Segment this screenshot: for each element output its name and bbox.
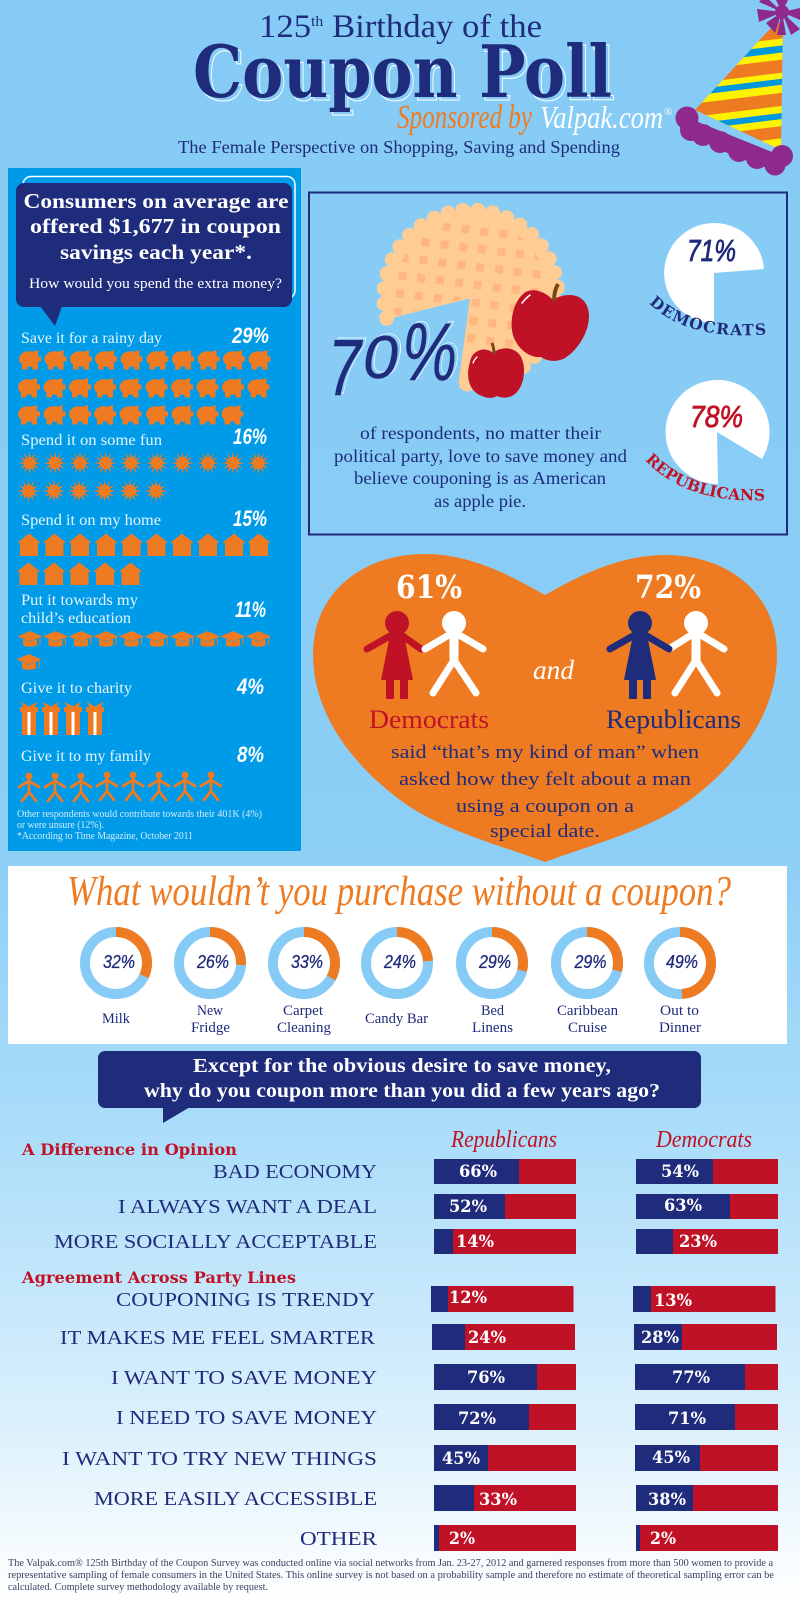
row: bad economy: 54%	[661, 1162, 699, 1181]
row: charity: Give it to charity	[21, 680, 132, 697]
icon: lattice pie with missing slice	[384, 210, 558, 388]
label: Democrats: Democrats	[369, 705, 489, 734]
row: couponing is trendy: COUPONING IS TRENDY	[116, 1289, 375, 1311]
donut: milk: Milk	[102, 1011, 130, 1027]
row: try new things: 45%	[442, 1449, 480, 1468]
row: other: 2%	[449, 1529, 475, 1548]
title: Coupon Poll: Coupon Poll	[196, 32, 615, 117]
stat: 61%: 61%	[396, 568, 462, 606]
title: Coupon Poll: Coupon Poll	[193, 29, 612, 114]
row: couponing is trendy: 12%	[449, 1288, 487, 1307]
text: of respondents	[334, 423, 627, 511]
stat: 70%: 7	[328, 323, 363, 412]
icon: large apple	[512, 284, 589, 361]
row: couponing is trendy	[116, 1286, 776, 1312]
row: more socially acceptable: MORE SOCIALLY ACCEPTABLE	[54, 1231, 377, 1253]
footnote: other respondents	[17, 809, 262, 842]
stat: 70%: 0	[363, 324, 398, 391]
stat: 70%	[328, 305, 460, 412]
icon: blue woman and white man	[610, 611, 724, 699]
column heading: Democrats: Democrats	[655, 1127, 752, 1153]
row: child's education: child’s education	[21, 610, 131, 627]
row: my family: Give it to my family	[21, 748, 151, 765]
row: try new things: I WANT TO TRY NEW THINGS	[62, 1448, 377, 1470]
row: bad economy: BAD ECONOMY	[213, 1161, 377, 1183]
callout: except for the obvious desire: Except for the obvious desire to save money,	[193, 1055, 611, 1077]
pie: democrats 71%: 71%	[687, 233, 736, 268]
subtitle: The Female Perspective on Shopping, Saving and Spending	[178, 137, 620, 157]
donut: caribbean cruise: Cruise	[568, 1020, 607, 1036]
row: couponing is trendy: 13%	[654, 1291, 692, 1310]
donut: new fridge: 26%	[196, 952, 229, 972]
donut: carpet cleaning: Cleaning	[277, 1020, 331, 1036]
donut: bed linens	[461, 932, 523, 1036]
row: more easily accessible: 33%	[479, 1490, 517, 1509]
pie: republicans 78%	[646, 380, 770, 501]
callout: except for the obvious desire	[98, 1051, 701, 1123]
row: more socially acceptable: 23%	[679, 1232, 717, 1251]
panel: how would you spend	[8, 168, 301, 851]
stat: 70%: %	[405, 305, 460, 396]
title: 125th Birthday of the: 125	[259, 9, 308, 45]
panel: heart	[313, 554, 777, 862]
row: always want a deal: 52%	[449, 1197, 487, 1216]
row: always want a deal: 63%	[664, 1196, 702, 1215]
donut: carpet cleaning: Carpet	[283, 1003, 324, 1019]
row: makes me feel smarter: IT MAKES ME FEEL SMARTER	[60, 1327, 376, 1349]
row: more socially acceptable	[54, 1229, 778, 1254]
pie: republicans 78%: 78%	[690, 399, 743, 434]
pie: republicans 78%: REPUBLICANS	[646, 452, 764, 501]
stat: 70%: 7	[331, 321, 366, 410]
row: charity: 4%	[236, 674, 264, 699]
row: want to save money: 76%	[467, 1368, 505, 1387]
row: need to save money: 71%	[668, 1409, 706, 1428]
footnote: survey methodology: representative sampling of female consumers in the United States. This online survey is not based on a probability sample and therefore no estimate of theoretical sampling error can be	[8, 1569, 774, 1581]
callout: consumers on average: savings each year*.	[60, 240, 252, 264]
row: try new things	[62, 1445, 778, 1471]
row: bad economy	[213, 1159, 778, 1184]
row: rainy day	[18, 323, 270, 424]
donut: bed linens: Linens	[472, 1020, 513, 1036]
footnote: other respondents: *According to Time Magazine, October 2011	[17, 831, 193, 842]
row: more socially acceptable: 14%	[456, 1232, 494, 1251]
donut: new fridge: New	[197, 1003, 223, 1019]
text: that's my kind of man: special date.	[490, 821, 600, 842]
text: of respondents: believe couponing is as American	[354, 468, 606, 488]
title: 125th Birthday of the: Birthday of the	[323, 9, 542, 45]
sponsor line	[397, 99, 672, 136]
row: makes me feel smarter: 28%	[641, 1328, 679, 1347]
row: bad economy: 66%	[459, 1162, 497, 1181]
donut: milk	[85, 932, 147, 1027]
row: need to save money: I NEED TO SAVE MONEY	[116, 1407, 377, 1429]
row: need to save money: 72%	[458, 1409, 496, 1428]
row: more easily accessible: 38%	[648, 1490, 686, 1509]
row: my family	[19, 742, 264, 801]
row: always want a deal	[118, 1194, 778, 1219]
callout: except for the obvious desire: why do you coupon more than you did a few years ago?	[144, 1080, 660, 1102]
row: my family: 8%	[237, 742, 264, 767]
row: some fun: 16%	[233, 424, 267, 449]
callout: consumers on average: How would you spend the extra money?	[29, 276, 282, 292]
row: other: OTHER	[300, 1528, 378, 1550]
row: more easily accessible: MORE EASILY ACCESSIBLE	[94, 1488, 377, 1510]
icon: party hat	[675, 0, 800, 176]
row: want to save money	[111, 1364, 778, 1390]
row: more easily accessible	[94, 1485, 778, 1511]
pie: democrats 71%	[649, 223, 766, 336]
row: child's education	[16, 592, 271, 670]
row: other: 2%	[650, 1529, 676, 1548]
callout: consumers on average	[16, 176, 295, 326]
row: charity	[20, 674, 264, 735]
sponsor line: Valpak.com	[540, 99, 663, 135]
donut: carpet cleaning: 33%	[291, 952, 323, 972]
donut: caribbean cruise: 29%	[574, 952, 606, 972]
row: other	[300, 1525, 778, 1551]
icon: small apple	[468, 343, 524, 398]
donut: caribbean cruise	[556, 932, 618, 1036]
footnote: other respondents: Other respondents would contribute towards their 401K (4%)	[17, 809, 262, 820]
heading: agreement across party lines: Agreement Across Party Lines	[21, 1268, 296, 1287]
row: rainy day: Save it for a rainy day	[21, 330, 162, 347]
row: rainy day: 29%	[231, 323, 269, 348]
row: my home: 15%	[233, 506, 267, 531]
donut: caribbean cruise: Caribbean	[557, 1003, 618, 1019]
donut: candy bar	[365, 932, 428, 1027]
donut: bed linens: Bed	[481, 1003, 504, 1019]
row: need to save money	[116, 1404, 778, 1430]
donut: out to dinner: Out to	[660, 1003, 699, 1019]
text: of respondents: as apple pie.	[434, 491, 526, 511]
row: always want a deal: I ALWAYS WANT A DEAL	[118, 1196, 377, 1218]
donut: out to dinner: 49%	[666, 952, 698, 972]
donut: candy bar: 24%	[383, 952, 416, 972]
donut: milk: 32%	[103, 952, 135, 972]
footnote: survey methodology: calculated. Complete survey methodology available by request.	[8, 1581, 268, 1593]
row: want to save money: I WANT TO SAVE MONEY	[111, 1367, 377, 1389]
donut: out to dinner	[649, 932, 711, 1036]
panel: apple pie	[308, 192, 788, 536]
text: that's my kind of man: said “that’s my kind of man” when	[391, 742, 700, 763]
heading: a difference in opinion: A Difference in Opinion	[21, 1140, 237, 1159]
row: child's education: Put it towards my	[21, 592, 138, 609]
donut: out to dinner: Dinner	[659, 1020, 701, 1036]
text: that's my kind of man	[391, 742, 700, 842]
column heading: Republicans: Republicans	[450, 1127, 557, 1153]
icon: red woman and white man	[367, 611, 483, 699]
row: my home	[18, 506, 270, 584]
title: 125th Birthday of the: th	[311, 14, 324, 30]
footnote: other respondents: or were unsure (12%).	[17, 820, 104, 831]
text: and: and	[533, 655, 575, 685]
row: makes me feel smarter	[60, 1324, 777, 1350]
row: try new things: 45%	[652, 1448, 690, 1467]
row: some fun: Spend it on some fun	[21, 432, 162, 449]
pie: democrats 71%: DEMOCRATS	[649, 295, 766, 336]
row: some fun	[17, 424, 270, 502]
callout: consumers on average: Consumers on average are	[24, 189, 288, 213]
text: that's my kind of man: using a coupon on a	[456, 796, 635, 817]
text: of respondents: of respondents, no matter their	[360, 423, 601, 443]
row: makes me feel smarter: 24%	[468, 1328, 506, 1347]
stat: 72%: 72%	[635, 568, 701, 606]
donut: new fridge	[179, 932, 241, 1036]
panel: what wouldn't you purchase	[8, 866, 787, 1044]
donut: bed linens: 29%	[478, 952, 511, 972]
sponsor line: ®	[664, 106, 672, 118]
text: of respondents: political party, love to save money and	[334, 446, 627, 466]
footnote: survey methodology	[8, 1557, 774, 1593]
label: Republicans: Republicans	[606, 705, 741, 734]
row: child's education: 11%	[235, 597, 266, 622]
text: that's my kind of man: asked how they felt about a man	[399, 769, 692, 790]
stat: 70%: 0	[366, 322, 401, 389]
row: want to save money: 77%	[672, 1368, 710, 1387]
donut: candy bar: Candy Bar	[365, 1011, 428, 1027]
sponsor line: Sponsored by	[397, 99, 533, 136]
row: my home: Spend it on my home	[21, 512, 161, 529]
donut: new fridge: Fridge	[191, 1020, 230, 1036]
stat: 70%: %	[402, 307, 457, 398]
callout: consumers on average: offered $1,677 in coupon	[30, 214, 281, 238]
donut: carpet cleaning	[273, 932, 335, 1036]
